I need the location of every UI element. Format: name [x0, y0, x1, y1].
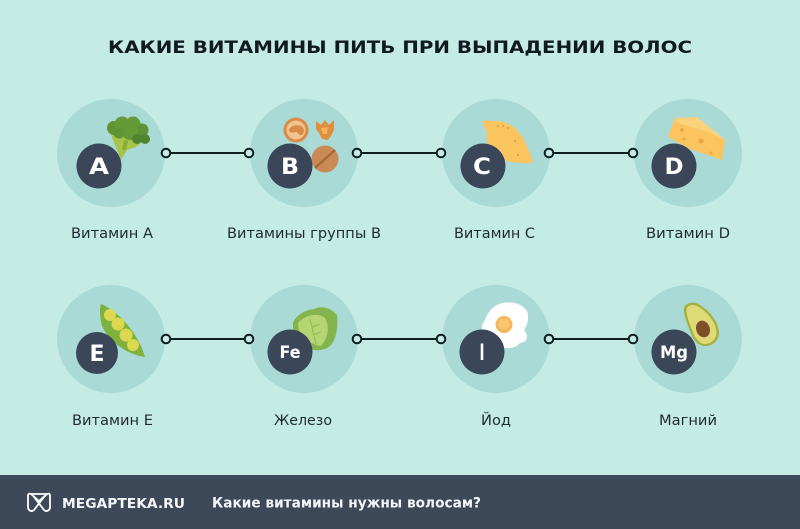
letter C: C: [473, 155, 491, 180]
icon: lemon: [483, 120, 533, 163]
item: vitamin D: [634, 99, 742, 207]
item: vitamin A: [57, 99, 165, 207]
brand name: MEGAPTEKA.RU: [62, 496, 185, 512]
item: iodine: [442, 285, 550, 393]
footer bar: [0, 475, 800, 529]
letter Mg: Mg: [660, 343, 688, 363]
letter D: D: [664, 155, 684, 180]
connector: E to Fe: [162, 335, 253, 343]
label: vitamin E: Витамин Е: [72, 413, 153, 429]
label: vitamin A: Витамин А: [71, 226, 153, 242]
label: vitamin D: Витамин D: [646, 226, 730, 242]
connector: C to D: [545, 149, 637, 157]
connector: Fe to I: [353, 335, 445, 343]
title: КАКИЕ ВИТАМИНЫ ПИТЬ ПРИ ВЫПАДЕНИИ ВОЛОС: [108, 38, 692, 57]
connector: B to C: [353, 149, 445, 157]
label: iron: Железо: [274, 413, 332, 429]
label: vitamins B: Витамины группы В: [227, 226, 381, 242]
icon: cheese: [668, 117, 725, 160]
item: iron: [250, 285, 358, 393]
icon: walnuts: [284, 118, 338, 172]
icon: broccoli: [107, 116, 150, 160]
icon: logo: [28, 494, 50, 511]
connector: A to B: [162, 149, 253, 157]
label: vitamin C: Витамин С: [454, 226, 535, 242]
letter E: E: [90, 342, 104, 367]
letter A: A: [89, 155, 109, 180]
footer text: Какие витамины нужны волосам?: [212, 496, 481, 512]
letter I: I: [480, 341, 484, 366]
item: vitamin C: [442, 99, 550, 207]
icon: fried egg: [482, 302, 528, 348]
item: vitamins B: [250, 99, 358, 207]
item: magnesium: [634, 285, 742, 393]
letter B: B: [281, 155, 299, 180]
icon: avocado: [684, 303, 719, 346]
label: magnesium: Магний: [659, 413, 717, 429]
label: iodine: Йод: [481, 411, 511, 429]
icon: cabbage: [293, 307, 337, 350]
letter Fe: Fe: [280, 343, 300, 363]
item: vitamin E: [57, 285, 165, 393]
icon: pea pod: [100, 304, 145, 357]
connector: I to Mg: [545, 335, 637, 343]
